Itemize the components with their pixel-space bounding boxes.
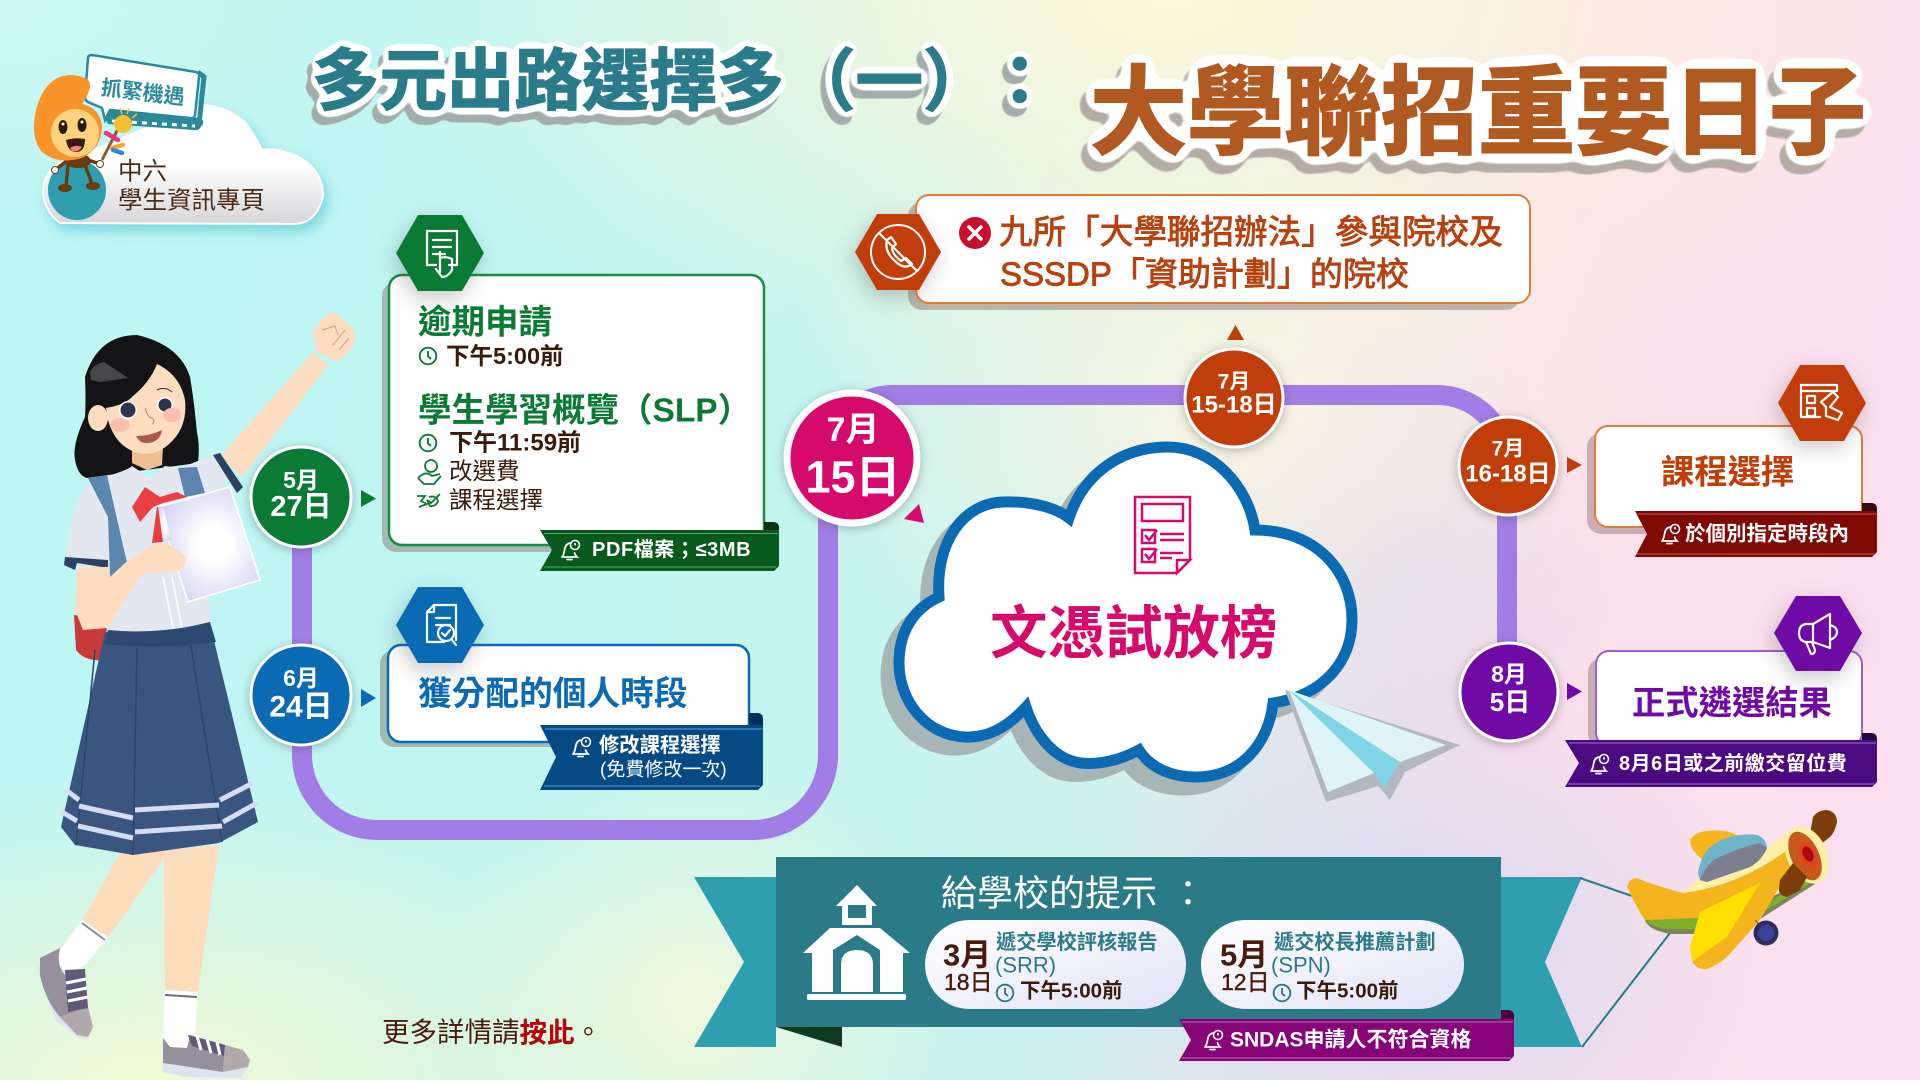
logo text: 中六 — [118, 158, 167, 186]
card shadow — [382, 282, 757, 552]
pill: SRR — [925, 920, 1186, 1009]
pill: SRR: 18日 — [944, 969, 993, 995]
illustration: student girl — [37, 312, 355, 1078]
ribbon: 修改課程選擇: 修改課程選擇 — [599, 734, 721, 757]
card shadow — [1587, 433, 1849, 534]
banner: 給學校的提示 — [694, 857, 1582, 1061]
canopy glass — [1700, 843, 1767, 882]
date: 5月27日 — [251, 447, 351, 547]
card: 課程選擇 — [1587, 365, 1877, 557]
ribbon: PDF — [540, 522, 779, 571]
arrow blue — [361, 689, 376, 707]
hair back — [74, 335, 199, 478]
arrow green — [361, 490, 376, 507]
heading: 課程選擇 — [1661, 454, 1794, 492]
icon: touch document — [396, 215, 484, 291]
card shadow — [1588, 658, 1850, 748]
front shoe — [162, 1035, 252, 1078]
callout body — [916, 195, 1530, 303]
ribbon: 留位費: 8月6日或之前繳交留位費 — [1619, 751, 1847, 775]
date: 7月16-18日 — [1459, 417, 1557, 515]
card: 正式遴選結果 — [1565, 596, 1877, 787]
logo text: 學生資訊專頁 — [118, 186, 265, 214]
back leg and sock — [58, 850, 170, 975]
ribbon: SNDAS — [1179, 1010, 1514, 1061]
canopy — [1698, 834, 1767, 882]
ribbon: 於個別指定時段內 — [1635, 503, 1877, 557]
time: 下午5:00前 — [446, 343, 564, 369]
ribbon: 修改課程選擇: (免費修改一次) — [600, 758, 727, 780]
title: 多元出路選擇多（一）：: ： — [986, 44, 1054, 120]
ribbon: PDF: PDF檔案；≤3MB — [592, 538, 751, 561]
time SLP: 下午11:59前 — [449, 430, 581, 456]
sleeve hem — [64, 557, 108, 570]
date: 7月15日 — [787, 393, 917, 523]
arrow up — [1227, 325, 1244, 340]
date: 7月15-18日: 15-18日 — [1191, 392, 1277, 418]
callout shadow — [908, 202, 1520, 310]
pill: SPN: 5月 — [1220, 938, 1268, 972]
mascot — [34, 75, 137, 192]
hair highlight — [90, 362, 128, 382]
logo: 中六學生資訊專頁 — [34, 55, 323, 224]
pill: SPN: 遞交校長推薦計劃 — [1274, 930, 1436, 954]
ribbon fold — [776, 1027, 842, 1047]
front leg and sock — [163, 845, 219, 1048]
ribbon: 修改課程選擇 — [540, 713, 763, 790]
back shoe — [37, 948, 93, 1039]
plane tow lines — [1580, 878, 1670, 1047]
left arm — [75, 543, 187, 630]
heading SLP: 學生學習概覽（SLP） — [418, 392, 751, 430]
shirt — [66, 455, 230, 647]
date: 7月15-18日 — [1185, 349, 1283, 447]
paper front — [158, 506, 171, 542]
callout text: SSSDP「資助計劃」的院校 — [1000, 256, 1409, 292]
purple timeline path — [302, 395, 1507, 830]
ribbon tail left — [694, 877, 776, 1047]
card: 逾期申請 — [382, 215, 779, 571]
cloud body — [899, 447, 1352, 777]
title: 多元出路選擇多（一）：: 多元出路選擇多 — [312, 44, 785, 120]
callout text — [999, 214, 1503, 292]
logo teal ball — [48, 160, 106, 220]
card shadow — [380, 650, 741, 747]
pill: SRR: (SRR) — [995, 952, 1056, 978]
card body — [389, 275, 764, 545]
nose and propeller — [1776, 810, 1838, 897]
course choice item: 課程選擇 — [449, 487, 543, 513]
banner panel — [776, 857, 1501, 1027]
icon: school — [803, 885, 910, 1000]
card body — [388, 645, 749, 742]
ribbon: 於個別指定時段內: 於個別指定時段內 — [1685, 522, 1849, 546]
belly shadow — [1645, 880, 1815, 934]
icon: document check — [396, 587, 484, 663]
card body — [1595, 426, 1862, 527]
date: 8月5日: 8月 — [1491, 661, 1527, 687]
banner title: 給學校的提示 ： — [941, 872, 1206, 914]
bow tie — [132, 487, 187, 543]
heading: 逾期申請 — [418, 304, 552, 342]
arrow purple — [1567, 683, 1582, 700]
fee item — [418, 458, 520, 484]
date: 6月24日 — [251, 645, 351, 745]
paper — [158, 487, 260, 602]
date: 8月5日 — [1460, 643, 1558, 741]
speech bubble: 抓緊機遇: 抓緊機遇 — [100, 77, 186, 110]
back straps — [88, 467, 205, 577]
ribbon tail right — [1501, 877, 1582, 1047]
date: 7月16-18日: 7月 — [1492, 438, 1524, 460]
heading: 獲分配的個人時段 — [418, 675, 688, 713]
date: 7月15日: 7月 — [827, 411, 879, 449]
wheel — [1754, 920, 1778, 946]
pill: SPN: 下午5:00前 — [1296, 980, 1399, 1002]
icon: results document — [1135, 497, 1190, 573]
wing — [1690, 883, 1782, 969]
date: 6月24日: 6月 — [283, 665, 319, 691]
icon: cross — [959, 217, 991, 249]
raised arm — [213, 312, 355, 493]
pill: SPN: (SPN) — [1271, 952, 1331, 978]
illustration: toy plane — [1627, 810, 1838, 969]
neck — [132, 448, 163, 470]
fuselage — [1627, 848, 1793, 920]
logo cloud — [43, 105, 323, 224]
face — [88, 364, 185, 454]
belly — [1645, 878, 1812, 929]
date: 7月15-18日: 7月 — [1218, 370, 1250, 394]
pill: SPN — [1201, 920, 1464, 1009]
pill: SRR: 3月 — [943, 938, 991, 972]
ribbon: 留位費 — [1565, 733, 1877, 787]
callout: 九所院校 — [855, 195, 1530, 310]
paper plane — [1285, 690, 1460, 802]
cloud shadow — [886, 460, 1339, 790]
arrow pink — [904, 504, 924, 523]
date: 5月27日: 27日 — [270, 491, 332, 523]
link text: 更多詳情請按此: 更多詳情請按此。 — [382, 1016, 602, 1048]
callout text: 九所「大學聯招辦法」參與院校及 — [999, 214, 1503, 252]
date: 8月5日: 5日 — [1490, 687, 1530, 717]
date: 7月15日: 15日 — [805, 452, 901, 502]
card body — [1596, 651, 1862, 746]
backpack — [74, 615, 107, 660]
speech bubble: 抓緊機遇 — [85, 55, 204, 130]
icon: online form — [1778, 365, 1866, 441]
pill: SRR: 遞交學校評核報告 — [996, 930, 1158, 954]
ribbon: SNDAS: SNDAS申請人不符合資格 — [1230, 1028, 1472, 1052]
fuselage top — [1683, 828, 1800, 893]
title: 大學聯招重要日子: 大學聯招重要日子 — [1090, 58, 1866, 168]
title: 多元出路選擇多（一）：: （一） — [788, 44, 991, 120]
skirt — [61, 620, 258, 855]
pill: SPN: 12日 — [1221, 969, 1270, 995]
fin — [1690, 830, 1737, 860]
logo text — [118, 158, 265, 214]
date: 6月24日: 24日 — [269, 690, 333, 724]
icon: no phone — [855, 214, 941, 290]
arrow orange — [1567, 457, 1582, 473]
icon: megaphone — [1774, 596, 1862, 671]
cloud: 文憑試放榜 — [886, 447, 1352, 790]
heading: 文憑試放榜 — [990, 602, 1278, 666]
pill: SRR: 下午5:00前 — [1020, 980, 1123, 1002]
date: 7月16-18日: 16-18日 — [1465, 460, 1551, 488]
fee item: 改選費 — [449, 458, 520, 484]
heading: 正式遴選結果 — [1632, 686, 1832, 722]
date: 5月27日: 5月 — [283, 467, 319, 493]
card: 獲分配的個人時段 — [380, 587, 763, 790]
